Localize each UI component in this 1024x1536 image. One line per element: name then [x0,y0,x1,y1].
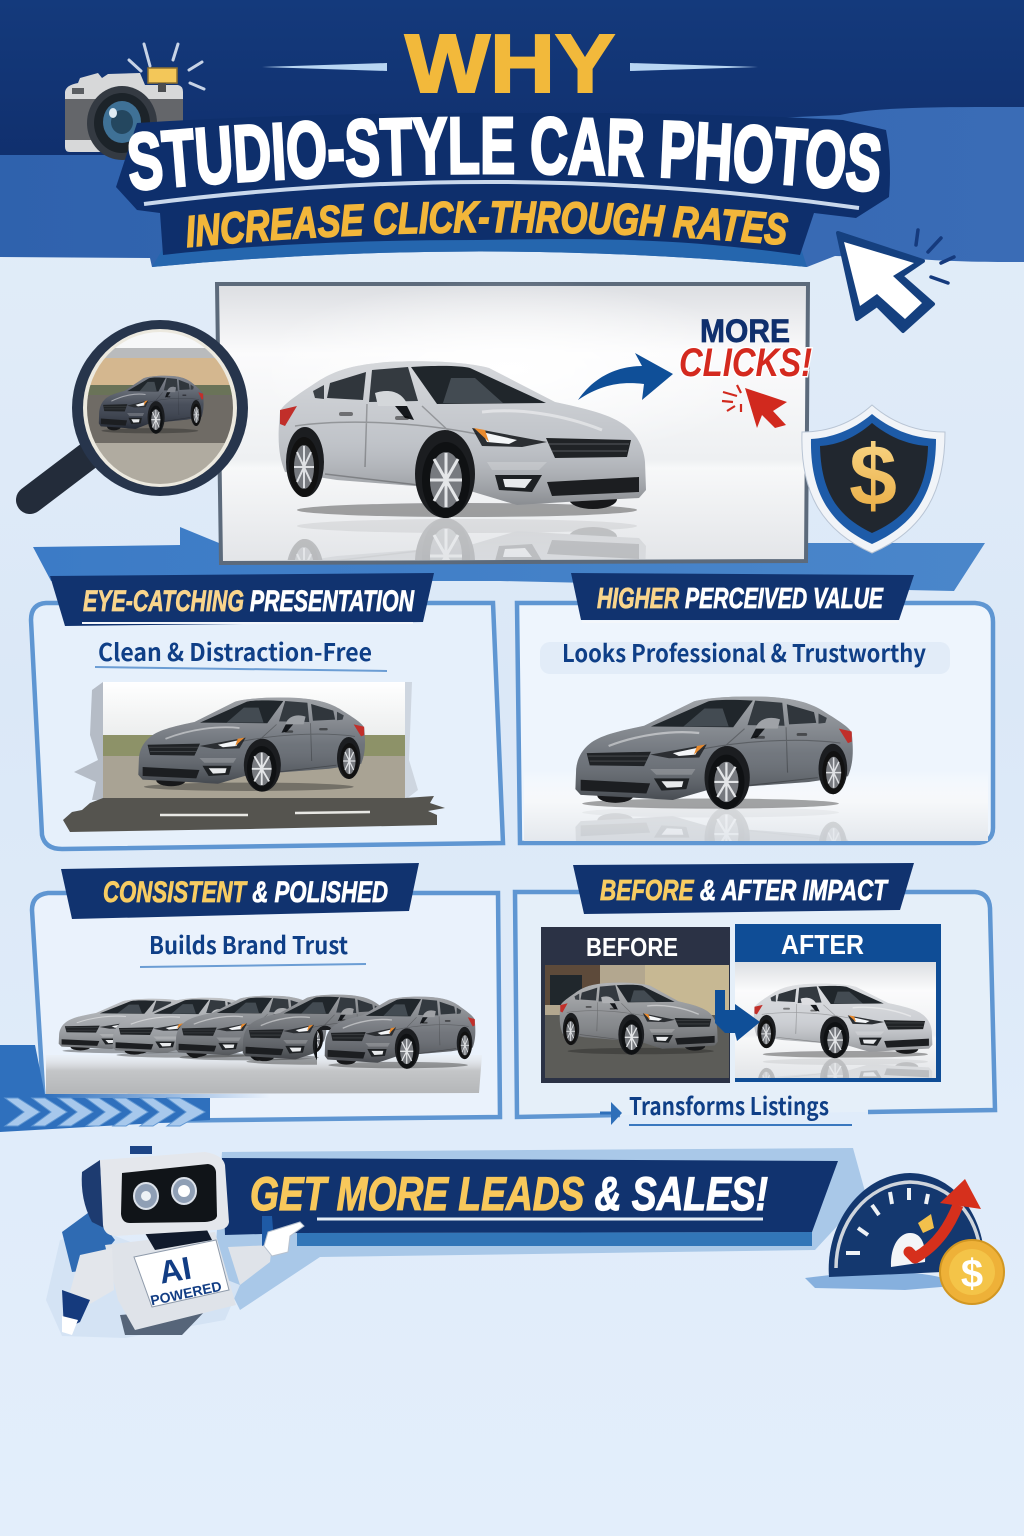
subheading: Builds Brand Trust [149,926,348,961]
title: studio-style car photos plaque: STUDIO-STYLE CAR PHOTOS [128,116,881,192]
icon: camera with flash [65,44,204,160]
before photo: BEFORE [586,932,678,962]
gold dollar coin: $ [961,1252,983,1296]
ai powered label: AI [156,1250,194,1291]
ribbon heading [61,863,419,919]
studio floor [524,770,988,841]
head [130,1146,152,1154]
sedan reflection [576,808,848,841]
soft shadow [46,1230,240,1338]
icon: dollar shield: $ [849,428,897,524]
parking lot photo [63,682,445,832]
ribbon heading: BEFORE & AFTER IMPACT [600,875,889,907]
subheading pill: Looks Professional & Trustworthy [562,634,926,669]
title: studio-style car photos plaque: INCREASE CLICK-THROUGH RATES [186,200,788,248]
before photo [541,927,730,1083]
title: why [262,17,758,110]
hero car [279,361,646,518]
more clicks label [679,313,812,385]
blue ribbon band behind hero [33,527,985,591]
grey sedan [138,698,365,792]
title: why: WHY [405,17,615,110]
fading blue line [45,1094,270,1098]
backpack [62,1210,115,1272]
gold dollar coin [940,1240,1004,1304]
ai powered label: POWERED [149,1278,223,1308]
icon: ai powered robot [46,1146,304,1338]
left blue patch [0,1045,210,1132]
hero car reflection [288,518,646,560]
legs [120,1308,208,1335]
right arm pointing [228,1245,272,1285]
icon: mouse cursor [838,230,954,331]
ribbon heading [573,863,914,914]
transforms listings caption: Transforms Listings [629,1087,829,1122]
title: studio-style car photos plaque [116,116,890,255]
call-to-action banner: GET MORE LEADS & SALES! [250,1167,768,1220]
panel frame [517,603,993,843]
subheading: Clean & Distraction-Free [98,633,372,668]
ai powered label [134,1240,229,1308]
icon: red cursor [722,385,787,428]
after photo [735,924,941,1082]
call-to-action banner [215,1148,866,1310]
panel: eye-catching presentation [31,573,503,849]
ribbon heading: CONSISTENT & POLISHED [103,876,388,909]
floor [46,1055,482,1094]
grey sedan studio [575,696,853,809]
ribbon heading: EYE-CATCHING PRESENTATION [83,585,415,618]
ribbon heading: HIGHER PERCEIVED VALUE [597,583,884,615]
chevrons [5,1098,205,1126]
panel frame [32,893,500,1122]
icon: speedometer with coin [805,1173,1004,1304]
ribbon heading [571,573,914,622]
more clicks label: MORE [700,313,790,349]
panel frame [31,603,503,849]
header band [0,0,1024,267]
transformation arrow [715,990,760,1041]
magnifying glass with dealership photo [30,320,248,500]
arrow to more clicks [578,353,673,400]
left arm [70,1248,114,1304]
torso [105,1232,236,1330]
icon: dollar shield [802,405,945,553]
panel: higher perceived value [514,573,996,846]
eyes [134,1178,196,1209]
panel frame [515,892,995,1117]
after photo: AFTER [781,929,864,960]
hero photo panel [215,282,813,565]
ribbon heading [50,573,434,626]
fleet of five sedans [59,995,475,1069]
panel: before and after impact [515,863,995,1132]
panel: consistent and polished [0,863,500,1132]
more clicks label: CLICKS! [679,341,812,385]
